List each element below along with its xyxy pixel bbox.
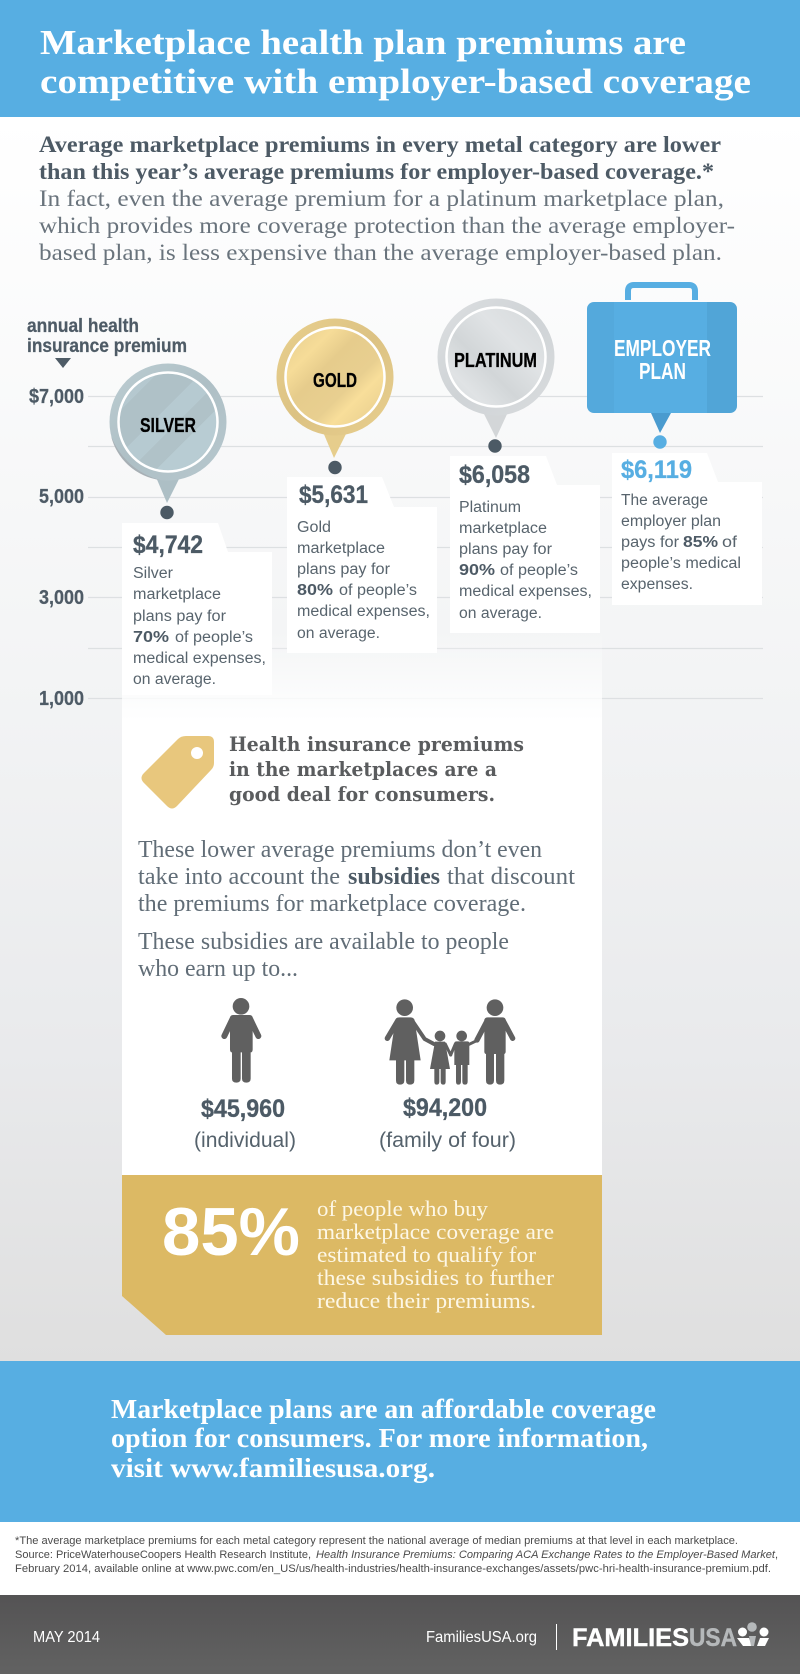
- subheading: good deal: in the marketplaces are a: [229, 757, 497, 781]
- stat: family income: $94,200: [403, 1094, 487, 1122]
- stat: individual income: (individual): [194, 1129, 296, 1152]
- card: silver: on average.: [133, 671, 216, 688]
- call to action band: visit www.familiesusa.org.: [111, 1453, 435, 1483]
- footnote: ,: [775, 1549, 778, 1561]
- card: gold: marketplace: [297, 540, 385, 557]
- card: employer: 85%: [683, 534, 718, 551]
- gold pin: [276, 318, 394, 474]
- card: gold: Gold: [297, 519, 331, 536]
- gold pin: GOLD: [313, 370, 357, 392]
- axis title: annual health: [27, 316, 139, 337]
- intro text block: which provides more coverage protection than the average employer-: [39, 213, 735, 238]
- icon: family of four: [387, 999, 513, 1085]
- card: platinum: plans pay for: [459, 541, 552, 558]
- callout: 85 percent: of people who buy: [317, 1196, 488, 1221]
- footnote: Health Insurance Premiums: Comparing ACA Exchange Rates to the Employer-Based Market: [316, 1549, 776, 1561]
- card: gold: $5,631: [299, 481, 368, 509]
- logo: Families USA: USA: [689, 1624, 737, 1652]
- axis title: [27, 316, 187, 368]
- callout: 85 percent: estimated to qualify for: [317, 1242, 537, 1267]
- card: silver: [122, 523, 272, 695]
- footnote: February 2014, available online at www.pwc.com/en_US/us/health-industries/health-insurance-exchanges/assets/pwc-hri-health-insurance-premium.pdf.: [15, 1563, 771, 1575]
- silver pin: [110, 364, 226, 519]
- text block: subsidies: subsidies: [348, 864, 440, 890]
- platinum pin: [438, 298, 554, 453]
- stat: individual income: [194, 1095, 296, 1152]
- axis labels: 3,000: [39, 587, 84, 609]
- card: gold: [287, 477, 437, 653]
- axis labels: 5,000: [39, 486, 84, 508]
- card: platinum: medical expenses,: [459, 583, 592, 600]
- footer bar: [0, 1595, 800, 1674]
- card: silver: Silver: [133, 565, 173, 582]
- axis labels: 1,000: [39, 688, 84, 710]
- panel: consumer deal fade top: [122, 630, 602, 720]
- card: gold: medical expenses,: [297, 603, 430, 620]
- text block: subsidies: [138, 837, 575, 917]
- card: platinum: on average.: [459, 605, 542, 622]
- footnote: Source: PriceWaterhouseCoopers Health Research Institute,: [15, 1549, 311, 1561]
- header banner: [0, 0, 800, 117]
- page background: [0, 117, 800, 1361]
- logo: Families USA: [572, 1622, 769, 1652]
- call to action band: option for consumers. For more information,: [111, 1423, 648, 1453]
- intro text block: Average marketplace premiums in every metal category are lower: [39, 132, 721, 157]
- card: platinum: of people’s: [500, 562, 578, 579]
- card: gold: 80%: [297, 582, 333, 599]
- title: [40, 23, 751, 101]
- stat: family income: (family of four): [379, 1129, 516, 1152]
- date: MAY 2014: [33, 1629, 100, 1646]
- footnote: [15, 1535, 778, 1575]
- title: Marketplace health plan premiums are: [40, 23, 686, 62]
- silver pin: SILVER: [140, 415, 196, 437]
- subheading: good deal: [229, 732, 524, 806]
- card: employer: The average: [621, 492, 708, 509]
- card: gold: plans pay for: [297, 561, 390, 578]
- card: silver: of people’s: [175, 629, 253, 646]
- callout: 85 percent: these subsidies to further: [317, 1265, 555, 1290]
- callout: 85 percent: reduce their premiums.: [317, 1288, 536, 1313]
- intro text block: than this year’s average premiums for employer-based coverage.*: [39, 159, 714, 184]
- card: gold: on average.: [297, 625, 380, 642]
- card: platinum: [450, 456, 600, 633]
- title: competitive with employer-based coverage: [40, 62, 751, 101]
- website: FamiliesUSA.org: [426, 1629, 537, 1646]
- card: gold: of people’s: [339, 582, 417, 599]
- text block: subsidies: take into account the: [138, 864, 340, 890]
- panel: consumer deal: [122, 720, 602, 1176]
- employer plan briefcase pin: PLAN: [639, 358, 686, 384]
- card: platinum: 90%: [459, 562, 495, 579]
- card: silver: plans pay for: [133, 608, 226, 625]
- text block: subsidies: that discount: [447, 864, 575, 890]
- chart gridlines: [88, 396, 763, 698]
- card: silver: marketplace: [133, 586, 221, 603]
- text block: subsidies: the premiums for marketplace coverage.: [138, 891, 526, 917]
- footnote: *The average marketplace premiums for each metal category represent the national average of median premiums at that level in each marketplace.: [15, 1535, 738, 1547]
- text block: eligibility: [138, 929, 509, 982]
- subheading: good deal: good deal for consumers.: [229, 782, 495, 806]
- icon: price tag: [142, 736, 214, 808]
- intro text block: [39, 132, 735, 265]
- card: employer: [612, 453, 762, 605]
- intro text block: In fact, even the average premium for a platinum marketplace plan,: [39, 186, 724, 211]
- call to action band: Marketplace plans are an affordable coverage: [111, 1394, 656, 1424]
- platinum pin: PLATINUM: [454, 350, 537, 372]
- card: employer: of: [722, 534, 738, 551]
- intro text block: based plan, is less expensive than the average employer-based plan.: [39, 240, 722, 265]
- card: silver: medical expenses,: [133, 650, 266, 667]
- card: platinum: $6,058: [459, 461, 530, 489]
- callout: 85 percent: 85%: [162, 1194, 300, 1270]
- stat: family income: [379, 1094, 516, 1152]
- subheading: good deal: Health insurance premiums: [229, 732, 524, 756]
- icon: individual person: [224, 998, 258, 1083]
- card: platinum: Platinum: [459, 499, 521, 516]
- call to action band: [0, 1361, 800, 1522]
- employer plan briefcase pin: EMPLOYER: [614, 335, 711, 361]
- axis title: insurance premium: [27, 336, 187, 357]
- card: silver: 70%: [133, 629, 169, 646]
- card: platinum: marketplace: [459, 520, 547, 537]
- card: employer: pays for: [621, 534, 679, 551]
- card: employer: employer plan: [621, 513, 721, 530]
- axis labels: [29, 386, 84, 710]
- card: employer: people’s medical: [621, 555, 741, 572]
- text block: eligibility: These subsidies are available to people: [138, 929, 509, 955]
- axis labels: $7,000: [29, 386, 84, 408]
- callout: 85 percent: [122, 1175, 602, 1335]
- card: employer: expenses.: [621, 576, 693, 593]
- callout: 85 percent: marketplace coverage are: [317, 1219, 554, 1244]
- text block: eligibility: who earn up to...: [138, 956, 298, 982]
- card: silver: $4,742: [133, 531, 203, 559]
- card: employer: $6,119: [621, 456, 692, 484]
- text block: subsidies: These lower average premiums don’t even: [138, 837, 542, 863]
- logo: Families USA: FAMILIES: [572, 1624, 689, 1652]
- employer plan briefcase pin: [587, 285, 737, 449]
- stat: individual income: $45,960: [201, 1095, 285, 1123]
